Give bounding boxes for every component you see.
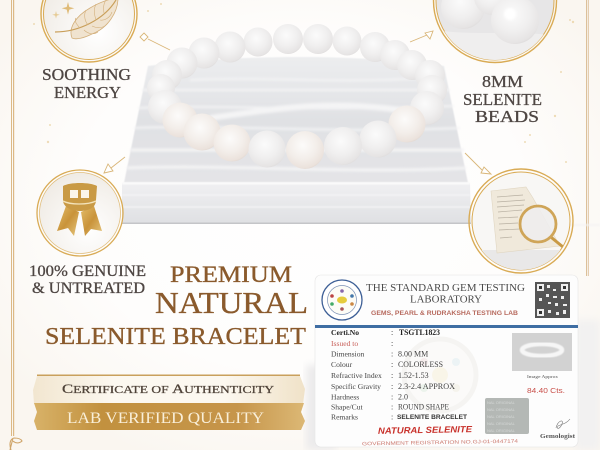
- title: premium natural selenite bracelet: PREMIUM: [170, 262, 292, 287]
- card hologram: NAL ORIGINAL: [487, 407, 516, 412]
- card divider band: [315, 325, 578, 328]
- card specification values: COLORLESS: [398, 360, 443, 369]
- label: soothing energy: SOOTHING: [42, 65, 131, 84]
- certificate card: [315, 275, 578, 447]
- card specification values: :: [391, 360, 393, 369]
- card lab seal: [322, 280, 362, 320]
- card specification labels: Shape/Cut: [331, 402, 364, 412]
- card specification values: :: [391, 382, 393, 391]
- card hologram: NAL ORIGINAL: [487, 400, 516, 405]
- card specification values: SELENITE BRACELET: [397, 414, 467, 421]
- card specification labels: Refractive Index: [331, 371, 382, 380]
- title: premium natural selenite bracelet: [45, 262, 308, 350]
- badge: certificate and magnifier: [469, 169, 574, 280]
- card header: [366, 283, 525, 317]
- card specification values: :: [391, 371, 393, 380]
- arrow: top right: [410, 31, 433, 42]
- card specification values: TSGTL1823: [399, 328, 440, 337]
- card specification values: 2.0: [398, 392, 408, 402]
- label: genuine and untreated: 100% GENUINE: [29, 263, 146, 280]
- lower table surface: [306, 224, 600, 450]
- card header: LABORATORY: [410, 294, 482, 306]
- badge: genuine ribbon seal: [37, 170, 123, 256]
- title: premium natural selenite bracelet: SELENITE BRACELET: [45, 324, 306, 350]
- card specification labels: Specific Gravity: [331, 382, 381, 391]
- card specification values: ROUND SHAPE: [398, 402, 449, 412]
- card hologram: NAL ORIGINAL: [487, 414, 516, 419]
- card specification values: :: [391, 339, 393, 348]
- card natural selenite stamp: NATURAL SELENITE: [378, 424, 473, 436]
- label: 8mm selenite beads: [463, 72, 542, 126]
- card header: THE STANDARD GEM TESTING: [366, 283, 525, 294]
- card specification values: :: [391, 402, 393, 412]
- card registration line: GOVERNMENT REGISTRATION NO.GJ-01-0447174: [362, 439, 518, 447]
- card specification labels: Issued to: [331, 339, 358, 348]
- label: genuine and untreated: [29, 263, 146, 297]
- arrow: bottom left: [104, 157, 125, 173]
- card specification values: 1.52-1.53: [398, 371, 429, 380]
- banner: certificate of authenticity and lab verified: LAB VERIFIED QUALITY: [67, 410, 264, 427]
- card image caption: Image Approx: [527, 374, 559, 379]
- card specification labels: Colour: [331, 360, 353, 369]
- selenite slab: [122, 57, 471, 224]
- arrow: bottom right: [465, 153, 491, 174]
- badge: soothing energy feather: [41, 0, 137, 62]
- card QR code: [535, 282, 570, 318]
- card hologram: NAL ORIGINAL: [487, 421, 516, 426]
- card header: GEMS, PEARL & RUDRAKSHA TESTING LAB: [371, 311, 519, 317]
- banner: certificate of authenticity and lab verified: CERTIFICATE OF A UTHENTICITY: [62, 381, 275, 396]
- label: 8mm selenite beads: BEADS: [475, 107, 539, 126]
- card watermark seal: [404, 339, 476, 411]
- right gold border: [586, 0, 589, 276]
- card specification labels: Certi.No: [331, 328, 359, 337]
- label: soothing energy: [42, 65, 131, 102]
- arrow: top left: [140, 33, 170, 50]
- gold dust: [33, 3, 574, 163]
- left gold border: [10, 0, 22, 450]
- card specification values: :: [391, 392, 393, 402]
- title: premium natural selenite bracelet: NATURAL: [155, 285, 308, 320]
- card hologram: NAL ORIGINAL: [487, 428, 516, 433]
- card carat weight: 84.40 Cts.: [527, 386, 565, 395]
- card gemologist signature: [540, 419, 576, 440]
- card gemologist signature: Gemologist: [540, 433, 576, 440]
- badge: 8mm selenite beads closeup: [434, 0, 556, 70]
- label: genuine and untreated: & UNTREATED: [32, 280, 145, 297]
- card specification labels: Remarks: [331, 412, 358, 422]
- card specification values: :: [391, 328, 393, 337]
- label: soothing energy: ENERGY: [54, 83, 121, 102]
- card hologram: [485, 398, 529, 434]
- card specification labels: Hardness: [331, 392, 359, 402]
- card specification values: :: [391, 350, 393, 358]
- label: 8mm selenite beads: SELENITE: [463, 90, 542, 109]
- card specification labels: [331, 328, 382, 422]
- card specification values: [391, 328, 467, 422]
- card specification values: 8.00 MM: [398, 350, 428, 358]
- banner: certificate of authenticity and lab verified: [33, 374, 305, 430]
- card specification values: 2.3-2.4 APPROX: [398, 382, 455, 391]
- card specification values: :: [391, 412, 393, 422]
- card specification labels: Dimension: [331, 350, 365, 358]
- label: 8mm selenite beads: 8MM: [482, 72, 523, 91]
- card bracelet photo: [512, 333, 572, 371]
- selenite bead bracelet: [147, 24, 447, 169]
